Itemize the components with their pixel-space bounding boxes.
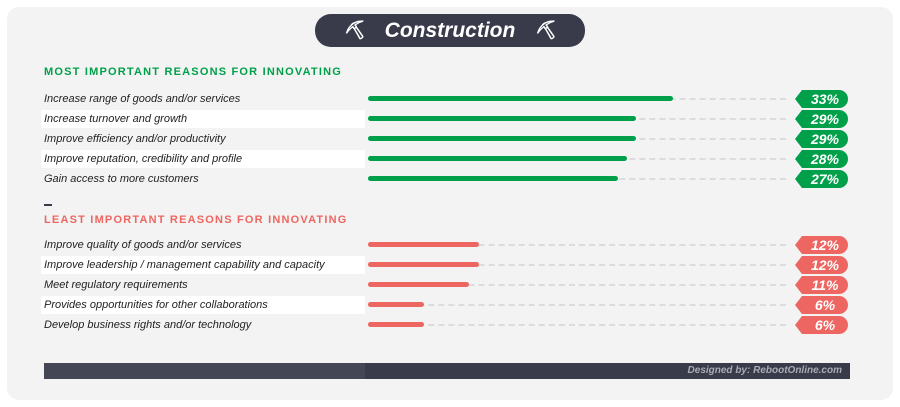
bar chart most (368, 90, 848, 188)
heading: most important: MOST IMPORTANT REASONS FOR INNOVATING (44, 66, 342, 78)
bar chart least: 12% (811, 237, 839, 253)
bar chart most: 28% (811, 151, 839, 167)
bar chart most: 33% (811, 91, 839, 107)
title pill (315, 14, 585, 47)
text: Gain access to more customers (44, 173, 199, 185)
text: Provides opportunities for other collaborations (44, 299, 268, 311)
title pill: Construction (385, 19, 515, 42)
bar chart most: 27% (811, 171, 839, 187)
text: Improve efficiency and/or productivity (44, 133, 226, 145)
bar chart least: 11% (812, 277, 838, 293)
bar chart least (368, 236, 848, 334)
text: Meet regulatory requirements (44, 279, 188, 291)
icon: worker right: ⛏ (534, 20, 557, 40)
text: Increase turnover and growth (44, 113, 187, 125)
text: Improve reputation, credibility and profile (44, 153, 242, 165)
bar chart least: 6% (815, 317, 835, 333)
heading: least important: LEAST IMPORTANT REASONS FOR INNOVATING (44, 214, 348, 226)
row labels least: Improve quality of goods and/or services (44, 239, 242, 251)
bar chart most: 29% (811, 111, 839, 127)
text: Develop business rights and/or technology (44, 319, 251, 331)
footer bar (44, 363, 850, 379)
bar chart least: 12% (811, 257, 839, 273)
text: Improve leadership / management capability and capacity (44, 259, 325, 271)
bar chart most: 29% (811, 131, 839, 147)
icon: worker left: ⛏ (343, 20, 366, 40)
bar chart least: 6% (815, 297, 835, 313)
credit text: Designed by: RebootOnline.com (688, 365, 842, 376)
row labels most: Increase range of goods and/or services (44, 93, 240, 105)
